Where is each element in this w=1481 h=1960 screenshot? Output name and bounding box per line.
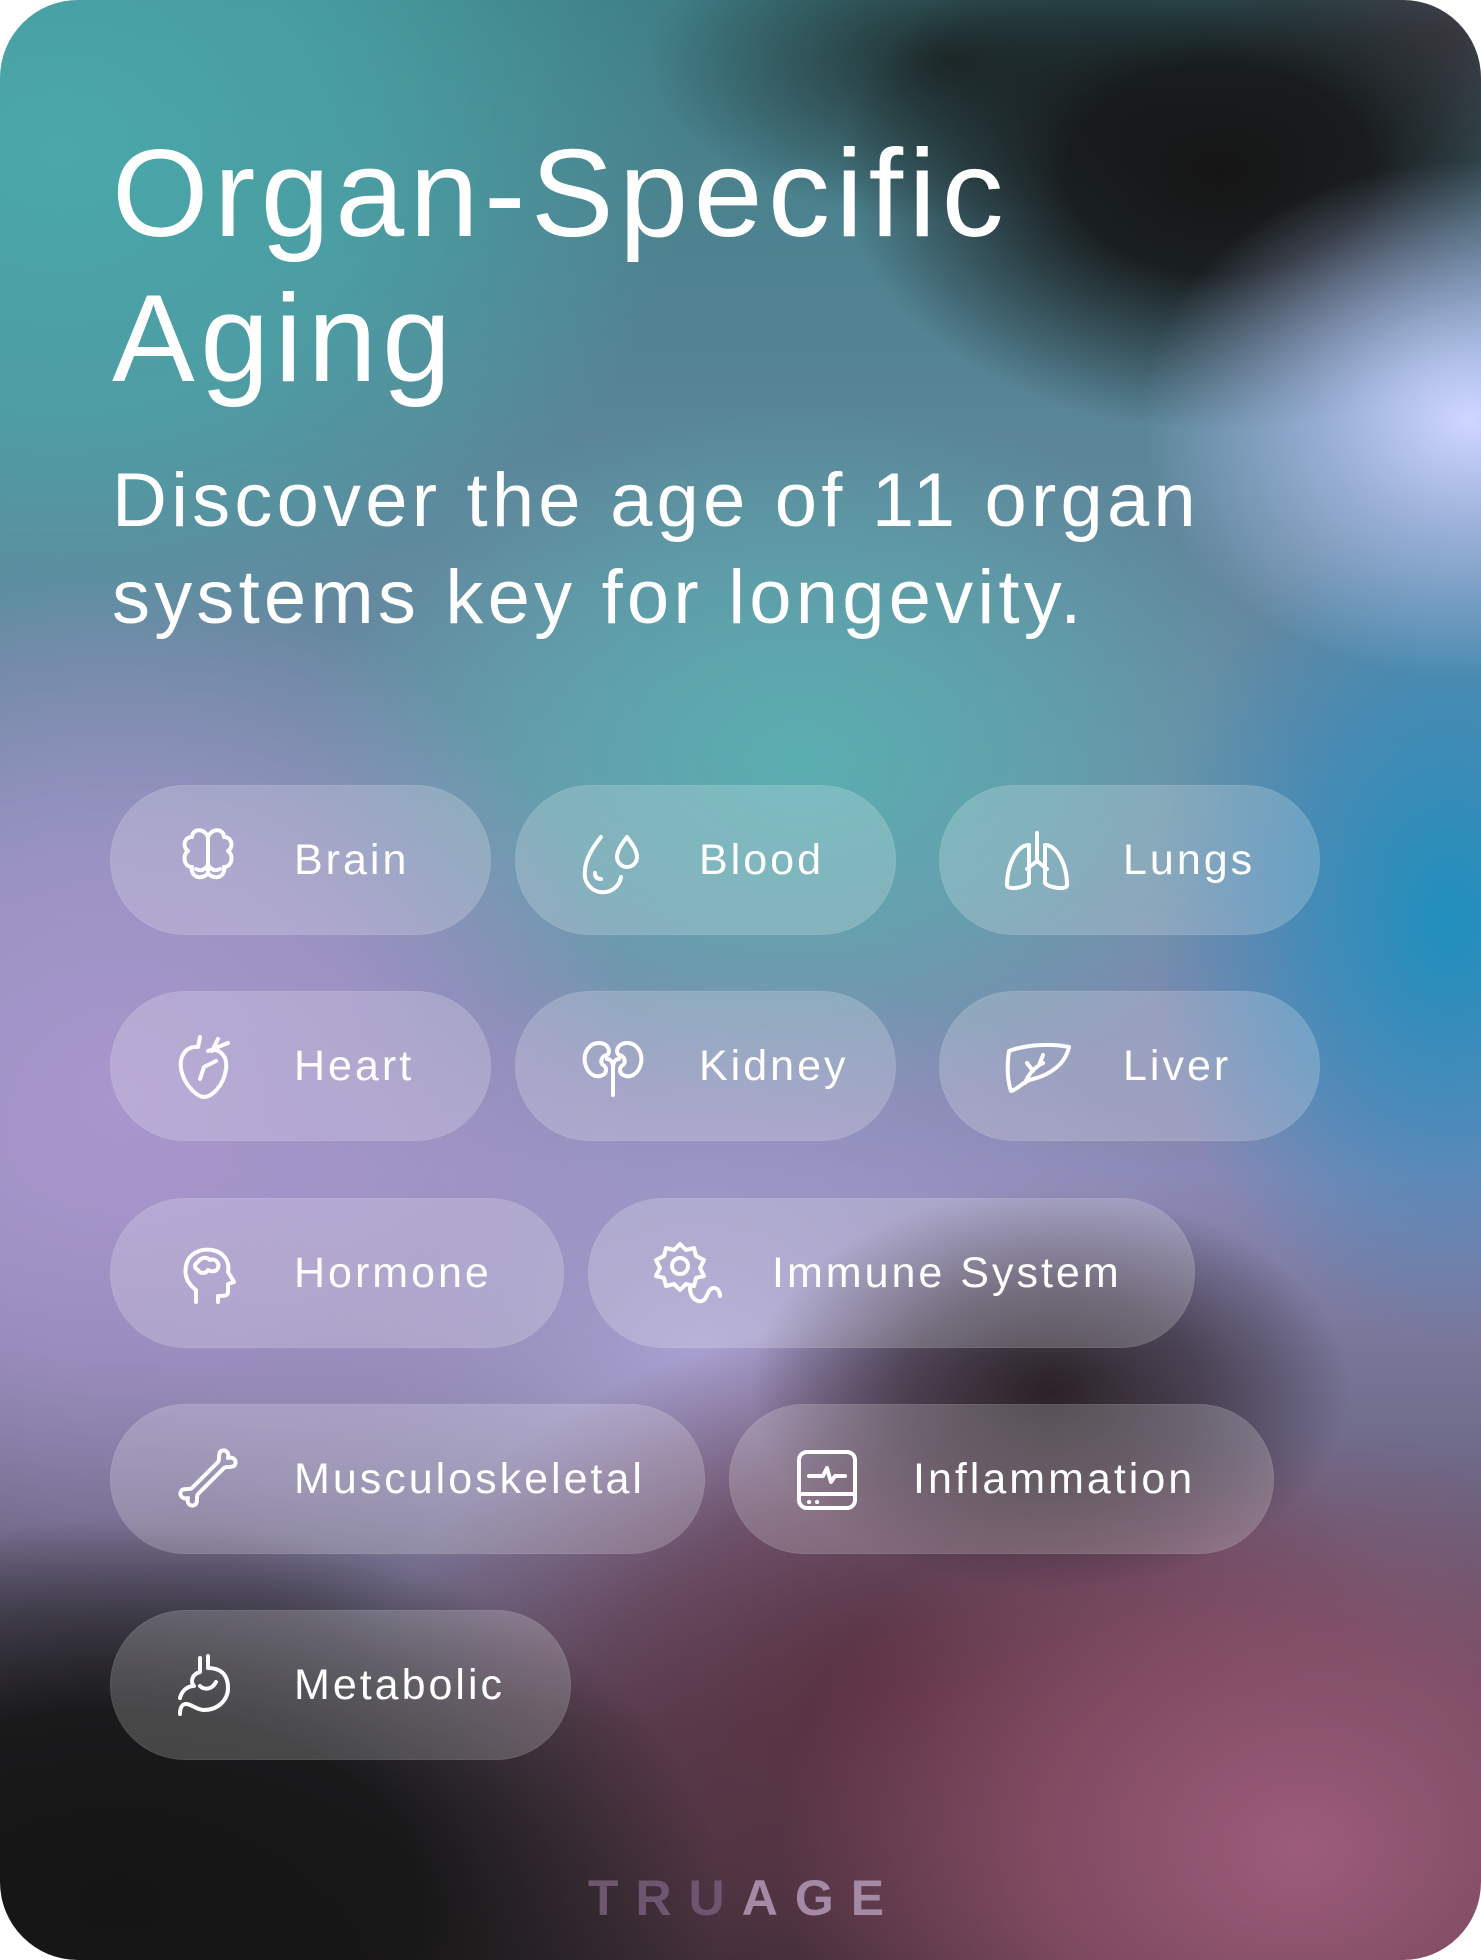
pill: Blood — [515, 785, 896, 935]
pill: Metabolic — [110, 1610, 571, 1760]
title — [112, 125, 1009, 408]
subtitle: Discover the age of 11 organ — [112, 458, 1200, 543]
pill: Brain — [110, 785, 491, 935]
subtitle — [112, 458, 1200, 640]
pill: Inflammation — [729, 1404, 1274, 1554]
pill: Inflammation: Inflammation — [913, 1455, 1195, 1503]
pill: Immune System: Immune System — [772, 1249, 1122, 1297]
pill: Heart — [110, 991, 491, 1141]
pill: Kidney — [515, 991, 896, 1141]
pill: Blood: Blood — [699, 836, 824, 884]
pill: Immune System — [588, 1198, 1195, 1348]
pill: Lungs — [939, 785, 1320, 935]
title: Aging — [112, 270, 457, 408]
pill: Metabolic: Metabolic — [294, 1661, 505, 1709]
logo: TRUAGE: TRUAGE — [588, 1870, 901, 1926]
pill: Liver: Liver — [1123, 1042, 1231, 1090]
pill: Hormone — [110, 1198, 564, 1348]
pill: Kidney: Kidney — [699, 1042, 848, 1090]
pill: Musculoskeletal: Musculoskeletal — [294, 1455, 645, 1503]
title: Organ-Specific — [112, 125, 1009, 263]
pill: Musculoskeletal — [110, 1404, 705, 1554]
pill: Lungs: Lungs — [1123, 836, 1255, 884]
subtitle: systems key for longevity. — [112, 555, 1086, 640]
pill: Hormone: Hormone — [294, 1249, 492, 1297]
pill: Heart: Heart — [294, 1042, 414, 1090]
pill: Liver — [939, 991, 1320, 1141]
pill: Brain: Brain — [294, 836, 409, 884]
